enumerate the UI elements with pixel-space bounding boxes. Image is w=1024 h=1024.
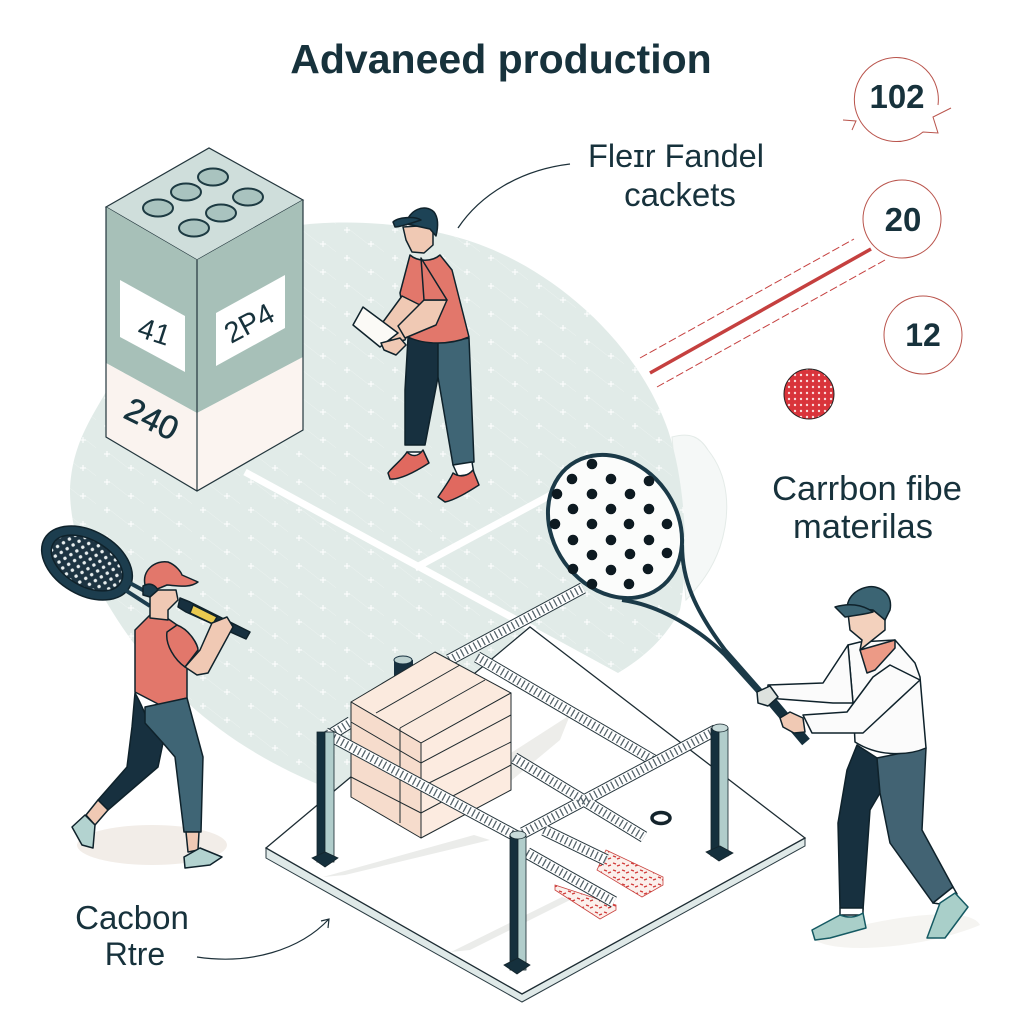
stat bubble 12: 12 — [905, 317, 941, 353]
red sample tiles — [555, 850, 663, 919]
label: carbon rtre: Rtre — [105, 936, 165, 972]
platform — [266, 627, 805, 1002]
label: Fleur Fandel rackets — [458, 138, 764, 228]
block labels: 240 — [119, 390, 185, 447]
figure: top worker — [353, 208, 479, 502]
puck — [652, 812, 670, 824]
speed lines — [640, 239, 885, 387]
figure: right player — [757, 587, 980, 948]
stat bubble 12 — [884, 296, 962, 374]
block labels: 2P4 — [219, 298, 280, 350]
faint crescent behind racket — [672, 435, 727, 600]
back rope and post — [327, 588, 653, 760]
label: carbon fibre materials: materilas — [793, 508, 933, 546]
label: carbon fibre materials: Carrbon fibe — [772, 470, 962, 508]
large racket — [520, 429, 806, 742]
red ball — [784, 369, 834, 419]
label: carbon fibre materials — [772, 470, 962, 546]
block labels — [119, 275, 285, 447]
block labels: 41 — [134, 312, 174, 353]
label: Fleur Fandel rackets: cackets — [624, 176, 736, 213]
figure: left player with racket — [29, 511, 250, 868]
posts — [312, 724, 733, 974]
background court disc — [70, 222, 685, 797]
stat bubble 102 — [843, 58, 951, 142]
stat bubble 20 — [863, 180, 941, 258]
cardboard boxes — [351, 652, 511, 838]
isometric storage block — [106, 148, 303, 491]
label: carbon rtre — [75, 899, 329, 972]
stat bubble 102: 102 — [869, 78, 925, 115]
title: Advaneed production — [290, 36, 712, 82]
stat bubble 20: 20 — [885, 201, 921, 238]
front ropes — [325, 730, 716, 902]
label: carbon rtre: Cacbon — [75, 899, 189, 936]
label: Fleur Fandel rackets: Fleɪr Fandel — [588, 138, 764, 174]
